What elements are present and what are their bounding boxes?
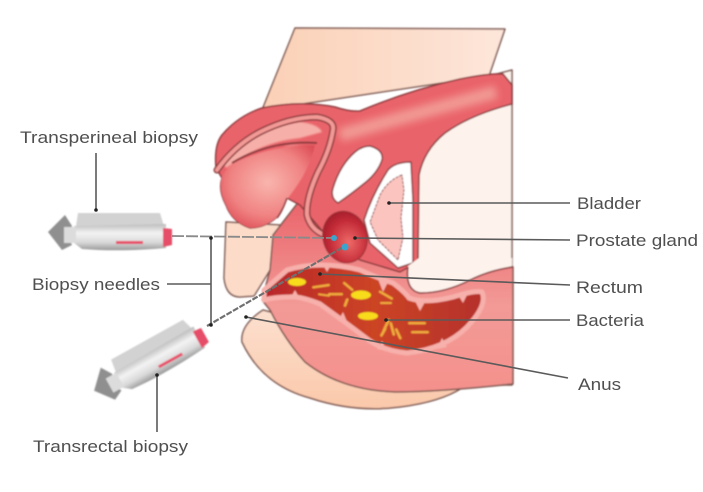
bladder wall bbox=[364, 162, 413, 268]
syringe: transrectal bbox=[85, 314, 211, 407]
lower buttock bbox=[242, 310, 462, 409]
thigh skin bbox=[224, 222, 280, 297]
label: Prostate gland: Prostate gland bbox=[576, 231, 698, 250]
tube highlight bbox=[340, 92, 496, 135]
urinary tract and penis body bbox=[216, 74, 512, 272]
anatomy illustration bbox=[216, 28, 513, 409]
penis-to-pelvis highlight bbox=[288, 150, 300, 170]
leader lines bbox=[96, 153, 570, 432]
label: Bladder: Bladder bbox=[577, 194, 641, 213]
penis head highlight bbox=[222, 122, 322, 168]
rectal wall edge bbox=[408, 267, 513, 293]
leader dots bbox=[94, 201, 391, 377]
label: Transperineal biopsy: Transperineal biopsy bbox=[20, 128, 199, 147]
label: Rectum: Rectum bbox=[576, 278, 643, 297]
label: Biopsy needles: Biopsy needles bbox=[32, 275, 160, 294]
needle: transrectal bbox=[207, 246, 345, 326]
rectum cavity bbox=[264, 265, 483, 353]
back skin panel bbox=[262, 28, 505, 110]
pale notch bbox=[408, 258, 512, 293]
lower pelvic tissue bbox=[262, 200, 513, 392]
pubic bone opening bbox=[332, 146, 382, 203]
yellow bacteria bbox=[288, 278, 378, 320]
label: Anus: Anus bbox=[578, 375, 621, 394]
needle tips bbox=[331, 235, 348, 250]
needle: transperineal bbox=[172, 236, 335, 238]
bladder bbox=[364, 162, 413, 268]
pelvis pale panel bbox=[405, 70, 512, 385]
prostate gland bbox=[317, 206, 373, 268]
label: Transrectal biopsy: Transrectal biopsy bbox=[33, 437, 189, 456]
rectum bbox=[264, 263, 483, 353]
bladder interior bbox=[370, 175, 404, 260]
scrotum bbox=[221, 145, 315, 228]
syringe: transperineal bbox=[48, 213, 172, 250]
shaft crease bbox=[277, 198, 287, 218]
bacteria rods bbox=[312, 281, 429, 340]
penis ridge bbox=[232, 143, 317, 163]
urethra bbox=[217, 117, 333, 234]
rectum folds bbox=[290, 263, 468, 351]
label: Bacteria: Bacteria bbox=[576, 311, 645, 330]
